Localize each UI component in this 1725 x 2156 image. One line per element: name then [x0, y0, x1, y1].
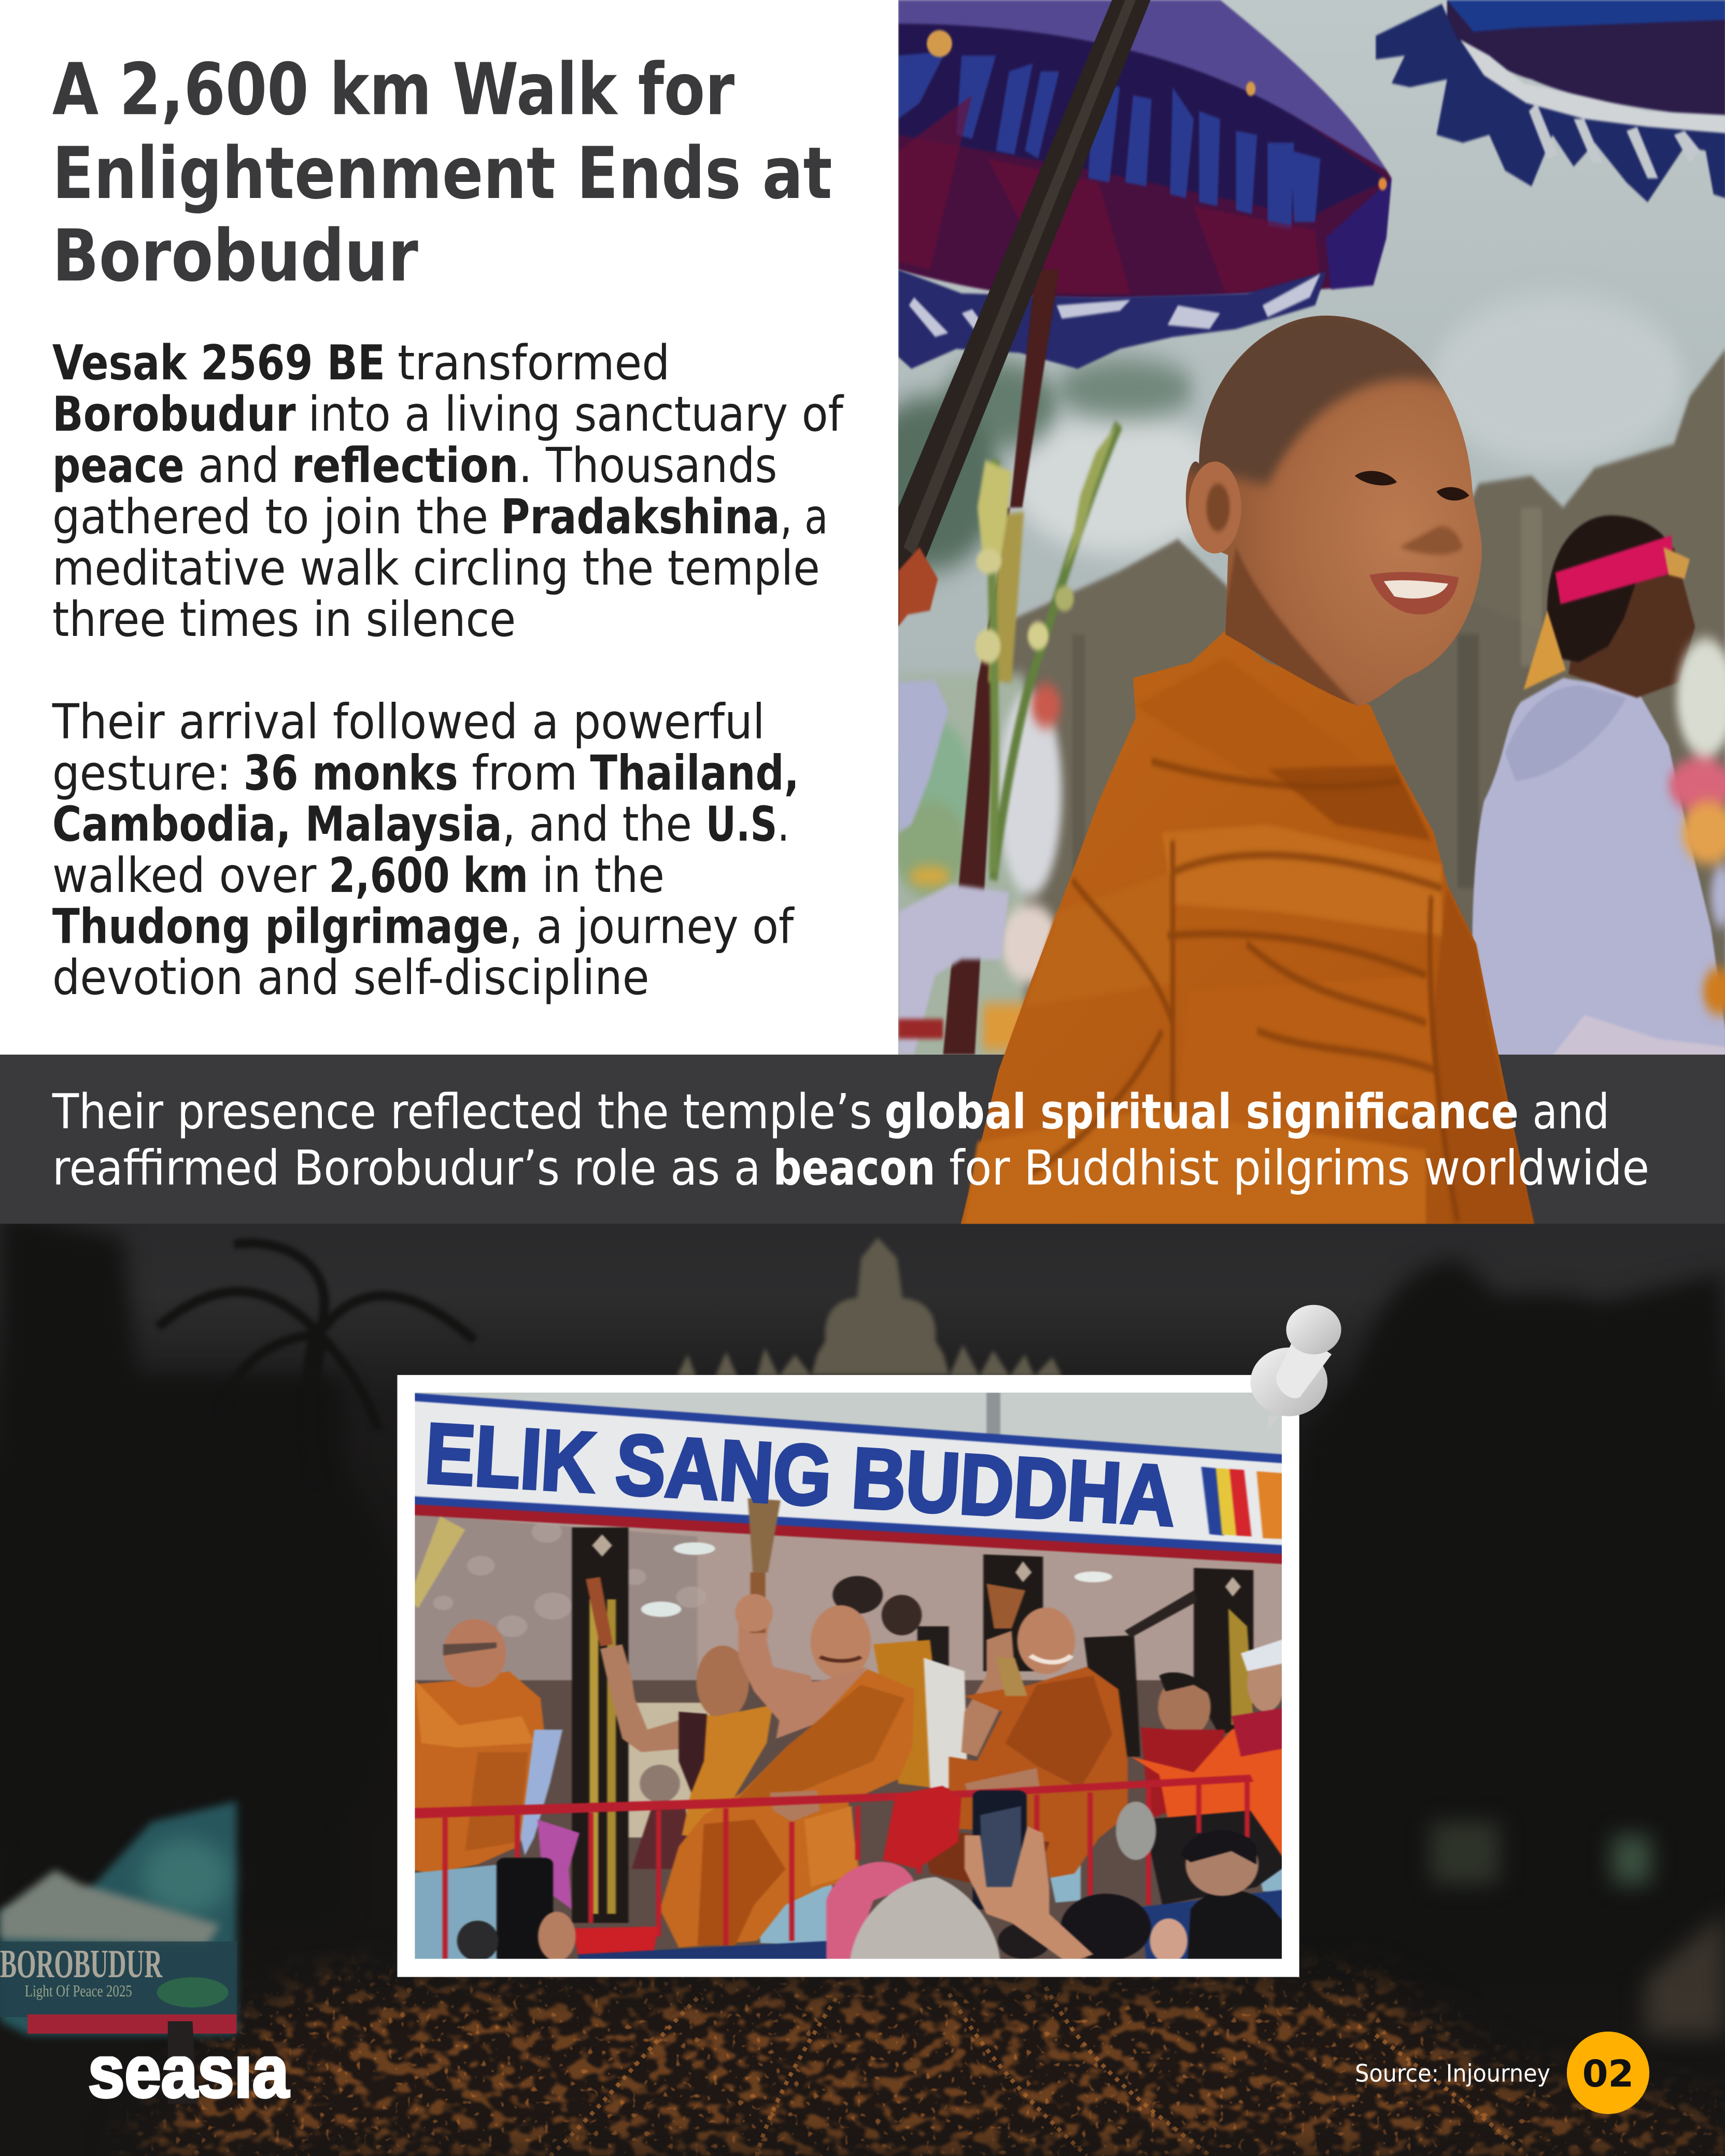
text block: Thudong pilgrimage: Their arrival followed a powerful — [52, 694, 765, 750]
text block: Vesak and Pradakshina: , a — [780, 489, 828, 545]
foreground phones — [497, 1857, 553, 1963]
LED screen on left: BOROBUDUR — [0, 1941, 163, 1986]
foreground stage edge — [578, 1941, 829, 1963]
lights — [674, 1542, 715, 1555]
foreground heads — [826, 1862, 913, 1963]
callout: global significance text — [52, 1084, 1649, 1196]
text block: Thudong pilgrimage: . — [777, 796, 789, 852]
text block: Thudong pilgrimage: in the — [542, 847, 664, 903]
ceiling — [408, 1505, 1288, 1734]
text block: Vesak and Pradakshina: Pradakshina — [501, 489, 780, 545]
front dark pole — [898, 0, 1151, 627]
head — [1186, 316, 1482, 706]
pillars — [572, 1527, 629, 1923]
blurred festival colours lower left — [893, 674, 1062, 1062]
title: A 2,600 km Walk for — [52, 48, 734, 131]
text block: Vesak and Pradakshina: reflection — [292, 437, 519, 493]
temple silhouette — [1004, 349, 1725, 1062]
text block: Vesak and Pradakshina: . Thousands — [519, 437, 777, 493]
text block: Vesak and Pradakshina: gathered to join the — [52, 489, 488, 545]
distant lights on right — [1431, 1822, 1725, 2035]
text block: Vesak and Pradakshina — [52, 335, 844, 647]
gladiolus stems — [975, 424, 1119, 880]
text block: Vesak and Pradakshina: meditative walk circling the temple — [52, 540, 820, 596]
back figures — [832, 1576, 883, 1614]
page number badge — [1567, 2032, 1649, 2114]
officials in red on right — [1158, 1677, 1211, 1738]
icon: silver push pin — [1250, 1305, 1341, 1430]
title: Borobudur — [52, 214, 418, 297]
text block: Thudong pilgrimage: U.S — [705, 796, 777, 852]
callout: global significance text: reaffirmed Borobudur’s role as a — [52, 1140, 761, 1196]
broom in hand — [748, 1498, 781, 1572]
text block: Thudong pilgrimage: from — [472, 745, 578, 801]
text block: Vesak and Pradakshina: transformed — [398, 335, 670, 391]
source credit: Source: Injourney — [1355, 2060, 1550, 2088]
right monk — [962, 1631, 1015, 1756]
banner lettering: ELIK SANG BUDDHA — [422, 1405, 1178, 1543]
text block: Thudong pilgrimage: Cambodia, Malaysia — [52, 796, 502, 852]
monk portrait overlapping band — [960, 309, 1534, 1225]
blue seat cloths — [408, 1864, 500, 1963]
callout: global significance text: for Buddhist pilgrims worldwide — [949, 1140, 1649, 1196]
dark quote band background — [0, 1055, 1725, 1225]
text block: Thudong pilgrimage: Thailand, — [590, 745, 799, 801]
crowd of lanterns — [0, 1925, 1725, 2156]
left figure in lavender with gloves — [898, 680, 1009, 1055]
text block: Vesak and Pradakshina: Borobudur — [52, 386, 296, 442]
palm and tree silhouettes — [0, 1210, 1725, 1994]
callout: global significance text: beacon — [773, 1140, 936, 1196]
callout: global significance text: global spiritual significance — [884, 1084, 1519, 1140]
text block: Thudong pilgrimage: 36 monks — [244, 745, 458, 801]
second maroon parasol pole — [943, 270, 1059, 1055]
LED screen on left: Light Of Peace 2025 — [25, 1982, 132, 2000]
photo: parasols, temple and procession behind the monk — [861, 0, 1725, 1062]
text block: Vesak and Pradakshina: Vesak 2569 BE — [52, 335, 385, 391]
text block: Vesak and Pradakshina: peace — [52, 437, 185, 493]
centre monk — [739, 1608, 817, 1721]
text block: Thudong pilgrimage: , and the — [502, 796, 692, 852]
text block: Thudong pilgrimage: , a journey of — [509, 898, 795, 954]
text block: Thudong pilgrimage: devotion and self-discipline — [52, 949, 649, 1005]
text block: Vesak and Pradakshina: and — [198, 437, 279, 493]
title — [52, 48, 832, 297]
man in lavender hoodie — [1472, 516, 1725, 1062]
callout: global significance text: and — [1532, 1084, 1609, 1140]
text block: Thudong pilgrimage: Thudong pilgrimage — [52, 898, 509, 954]
logo: seasia: seasia — [88, 2030, 289, 2113]
stupa of Borobudur — [646, 1238, 1080, 1377]
pinned photo: monks greeting the crowd — [397, 1375, 1299, 1977]
text block: Thudong pilgrimage: walked over — [52, 847, 317, 903]
sky — [408, 1388, 1288, 1487]
text block: Vesak and Pradakshina: into a living sanctuary of — [308, 386, 844, 442]
background photo: Borobudur at night with crowd — [0, 1210, 1725, 2156]
text block: Thudong pilgrimage — [52, 694, 799, 1005]
red railing — [408, 1775, 1253, 1819]
page number badge: 02 — [1582, 2052, 1634, 2095]
banner — [408, 1395, 1288, 1557]
second monk — [600, 1644, 698, 1752]
text block: Thudong pilgrimage: 2,600 km — [329, 847, 528, 903]
LED screen on left — [0, 1802, 236, 2104]
title: Enlightenment Ends at — [52, 132, 832, 215]
bokeh droplets — [433, 1521, 706, 1637]
big left parasol — [898, 0, 1392, 299]
text block: Vesak and Pradakshina: three times in silence — [52, 591, 516, 647]
lower parasol fringe — [898, 270, 1327, 368]
top right parasol — [1376, 0, 1725, 202]
festive blur right edge — [1669, 639, 1725, 1015]
text block: Thudong pilgrimage: gesture: — [52, 745, 231, 801]
red drum and bucket — [883, 1786, 962, 1869]
white photo frame — [397, 1375, 1299, 1977]
face features — [1355, 471, 1397, 486]
callout: global significance text: Their presence reflected the temple’s — [52, 1084, 872, 1140]
left monk — [408, 1671, 546, 1874]
robe — [960, 630, 1534, 1225]
